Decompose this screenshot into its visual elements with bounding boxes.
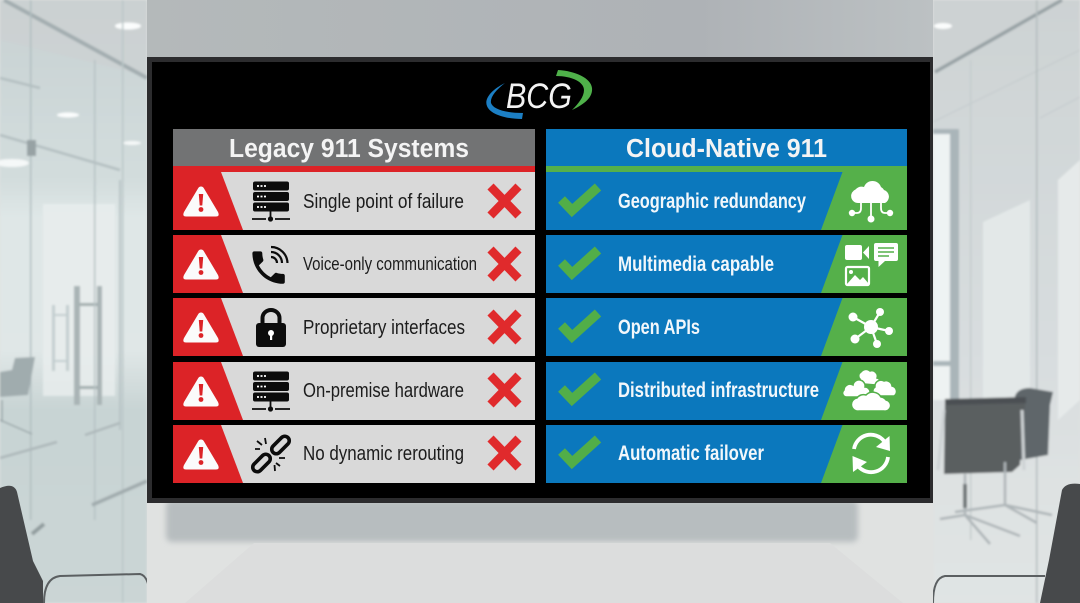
heading: cloud-native — [546, 129, 907, 172]
row: no dynamic rerouting: No dynamic rerouting — [303, 443, 464, 465]
row: open APIs — [546, 298, 907, 356]
row: open APIs: Open APIs — [618, 316, 700, 339]
logo: BCG: BCG — [506, 77, 572, 116]
row: single point of failure: Single point of failure — [303, 191, 464, 213]
row: multimedia capable: Multimedia capable — [618, 253, 774, 276]
wall display screen — [147, 57, 933, 503]
panel: legacy 911 systems — [173, 129, 535, 483]
conference table — [185, 543, 903, 603]
left glass wall — [0, 0, 147, 603]
row: multimedia capable — [546, 235, 907, 293]
left foreground chair — [0, 486, 43, 603]
row: distributed infrastructure: Distributed infrastructure — [618, 379, 819, 402]
row: on-premise hardware: On-premise hardware — [303, 380, 464, 402]
heading: cloud-native: Cloud-Native 911 — [626, 135, 827, 163]
row: no dynamic rerouting — [173, 425, 535, 483]
row: voice-only communication — [173, 235, 535, 293]
chair armrest chrome — [44, 574, 150, 603]
row: proprietary interfaces: Proprietary interfaces — [303, 317, 465, 339]
row: automatic failover: Automatic failover — [618, 442, 764, 465]
heading: legacy — [173, 129, 535, 172]
row: geographic redundancy: Geographic redundancy — [618, 190, 806, 213]
back wall — [147, 0, 933, 603]
right glass wall — [933, 0, 1080, 603]
row: single point of failure — [173, 172, 535, 230]
row: proprietary interfaces — [173, 298, 535, 356]
panel: cloud-native 911 — [546, 129, 907, 483]
heading: legacy: Legacy 911 Systems — [229, 135, 469, 163]
row: automatic failover — [546, 425, 907, 483]
logo: BCG — [486, 70, 592, 119]
row: distributed infrastructure — [546, 362, 907, 420]
right foreground chair — [1040, 484, 1080, 603]
row: geographic redundancy — [546, 172, 907, 230]
row: on-premise hardware — [173, 362, 535, 420]
right chair armrest — [933, 576, 1045, 603]
row: voice-only communication: Voice-only communication — [303, 254, 477, 274]
